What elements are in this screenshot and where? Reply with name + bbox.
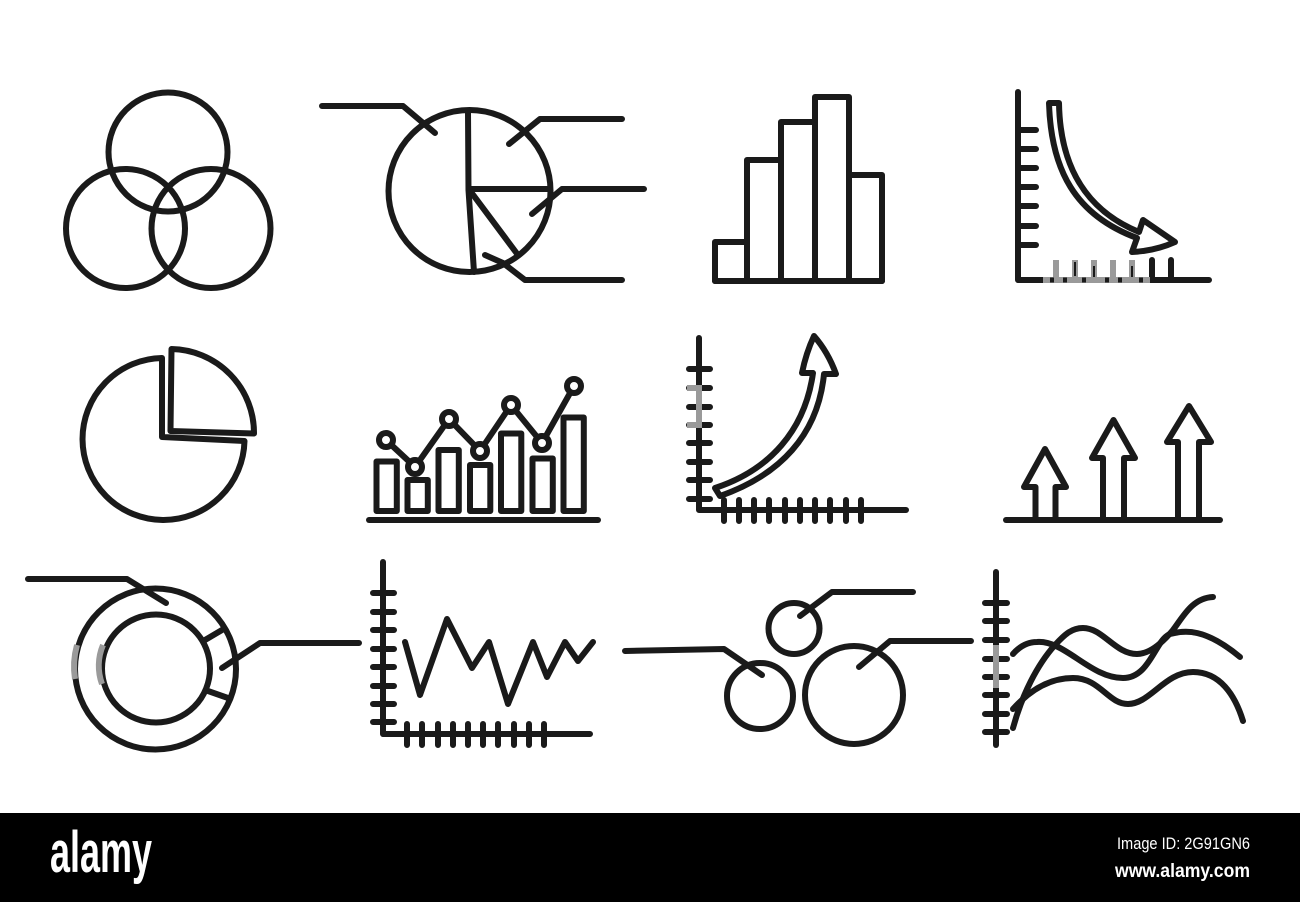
icon: pie chart with leader lines: [322, 106, 644, 280]
icon: venn diagram: [66, 92, 270, 288]
footer logo: alamy: alamy: [50, 820, 152, 885]
icon: three rising arrows: [1006, 406, 1220, 520]
icon: bubble chart with leader lines: [625, 592, 971, 744]
icon: donut chart with leader lines: [28, 579, 359, 750]
icon: multi-curve line chart: [985, 572, 1243, 745]
icon: bar chart with trend line: [369, 379, 598, 520]
icon: histogram bars: [715, 97, 882, 281]
icon: pie chart with detached slice: [83, 349, 254, 520]
icon: zigzag line chart: [373, 562, 593, 745]
watermark footer bar: [0, 813, 1300, 902]
footer image id: Image ID: 2G91GN6: [1117, 834, 1250, 853]
icon: falling curve chart: [1018, 92, 1209, 280]
footer website: www.alamy.com: [1114, 861, 1250, 882]
icon: rising curve chart: [687, 336, 906, 521]
